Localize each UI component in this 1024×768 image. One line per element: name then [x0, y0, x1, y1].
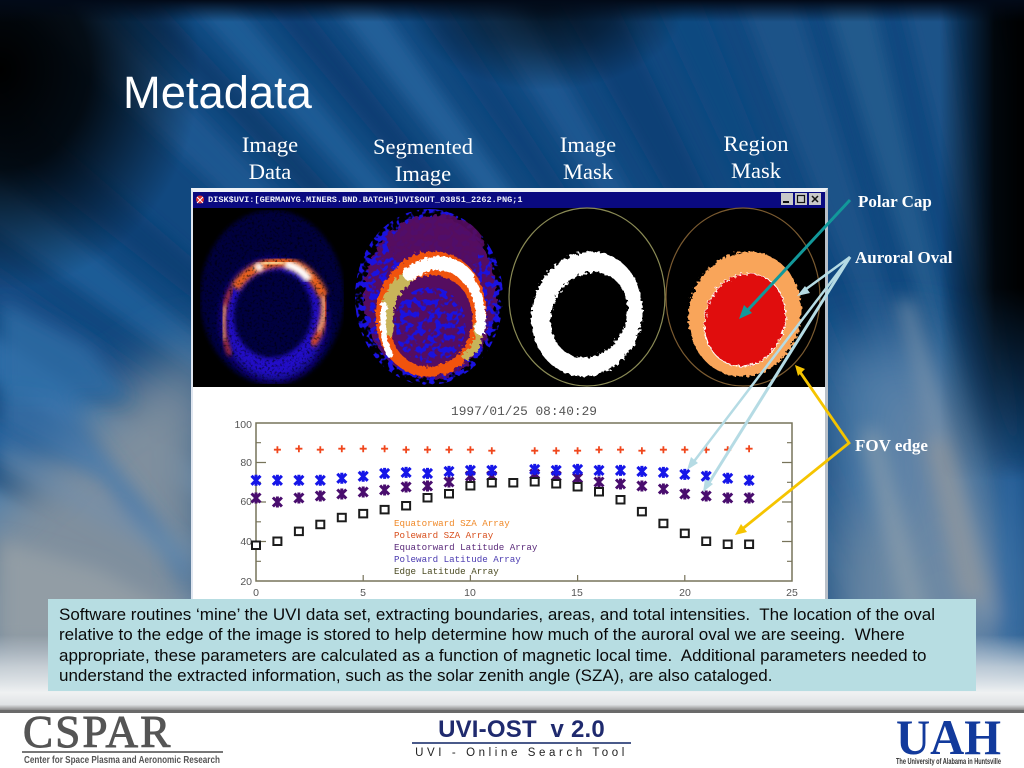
greys right [830, 340, 1024, 700]
logo: UVI-OST: UVI-OST v 2.0 [438, 716, 605, 743]
heading: Segmented Image [373, 134, 473, 186]
axis labels: 100 [234, 419, 252, 431]
axis labels: 10 [464, 587, 476, 599]
footer band [0, 710, 1024, 768]
axis labels: 60 [240, 496, 252, 508]
legend: Edge Latitude Array [394, 566, 499, 577]
heading: Segmented Image: Image [395, 161, 451, 186]
logo: UVI-OST: UVI - Online Search Tool [415, 747, 628, 759]
black image background [193, 208, 825, 387]
window title bar [193, 192, 825, 208]
series: SZA markers [277, 449, 749, 451]
logo: CSPAR: CSPAR [23, 707, 172, 757]
axis labels: 0 [253, 587, 259, 599]
axis labels: 15 [571, 587, 583, 599]
logo: UAH: UAH [896, 709, 1001, 765]
window title bar: DISK$UVI:[GERMANYG.MINERS.BND.BATCH5]UVI$OUT_03851_2262.PNG;1 [208, 195, 523, 205]
arrows: FOV edge [735, 365, 849, 535]
label: Auroral Oval: Auroral Oval [855, 248, 952, 267]
heading: Region Mask [724, 131, 788, 183]
text callout: relative to the edge of the image is stored to help determine how much of the auroral oval we are seeing. Where [59, 625, 905, 644]
legend: Poleward SZA Array [394, 530, 494, 541]
axis labels: 40 [240, 536, 252, 548]
axis labels: 20 [679, 587, 691, 599]
heading: Region Mask: Region [724, 131, 788, 156]
panel: screenshot of metadata window [191, 188, 828, 608]
axis labels: 20 [240, 576, 252, 588]
legend: Poleward Latitude Array [394, 554, 521, 565]
label: Polar Cap: Polar Cap [858, 192, 932, 211]
logo: UVI-OST [412, 716, 631, 759]
series: poleward latitude [256, 469, 749, 480]
title: Metadata [123, 67, 312, 118]
logo: CSPAR: Center for Space Plasma and Aeronomic Research [24, 754, 220, 766]
label: FOV edge: FOV edge [855, 436, 928, 455]
arrows: auroral oval [687, 257, 850, 492]
legend [394, 518, 538, 577]
dark corners [0, 0, 200, 290]
heading: Image Data: Image [242, 132, 298, 157]
series: equatorward latitude [256, 474, 749, 502]
text callout: appropriate, these parameters are calculated as a function of magnetic local time. Additional parameters needed to [59, 646, 927, 665]
title bar controls [196, 193, 821, 205]
legend: Equatorward SZA Array [394, 518, 510, 529]
logo: CSPAR [22, 707, 223, 766]
text callout [48, 599, 976, 691]
image data: raw aurora [200, 210, 344, 384]
heading: Image Mask: Image [560, 132, 616, 157]
heading: Region Mask: Mask [731, 158, 781, 183]
image mask: FOV and white oval [509, 208, 665, 389]
segmented image: colour classes [355, 209, 503, 386]
axis labels: 5 [360, 587, 366, 599]
axis labels: 80 [240, 457, 252, 469]
logo: UAH: The University of Alabama in Huntsville [896, 757, 1001, 766]
plot title: 1997/01/25 08:40:29 [451, 404, 597, 419]
heading: Image Mask: Mask [563, 159, 613, 184]
text callout: Software routines ‘mine’ the UVI data set, extracting boundaries, areas, and total intensities. The location of the oval [59, 605, 935, 624]
series: edge latitude [256, 482, 749, 546]
heading: Image Data [242, 132, 298, 184]
heading: Segmented Image: Segmented [373, 134, 473, 159]
scatter chart [234, 419, 798, 599]
text callout: understand the extracted information, such as the solar zenith angle (SZA), are also cataloged. [59, 666, 772, 685]
arrow: polar cap [739, 200, 850, 319]
axis labels [234, 419, 798, 599]
heading: Image Data: Data [249, 159, 291, 184]
greys lower left [0, 340, 210, 720]
region mask: orange oval and red polar cap [666, 208, 820, 389]
heading: Image Mask [560, 132, 616, 184]
legend: Equatorward Latitude Array [394, 542, 538, 553]
axis labels: 25 [786, 587, 798, 599]
